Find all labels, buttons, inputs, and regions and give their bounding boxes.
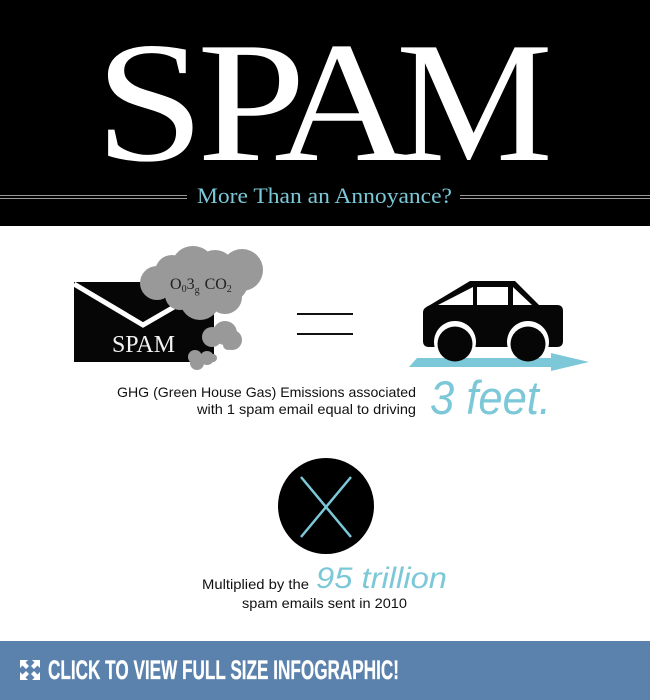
title: S (95, 8, 205, 198)
cloud label: 3 (187, 276, 195, 293)
subtitle: More Than an Annoyance? (197, 183, 452, 208)
icon: small cloud (188, 350, 217, 370)
cloud label: CO (205, 276, 227, 293)
title: A (274, 8, 412, 198)
text: multiplied by: Multiplied by the (202, 576, 309, 592)
icon: large cloud (140, 246, 263, 320)
cloud label: 2 (227, 284, 232, 295)
cloud label: g (195, 285, 200, 296)
title: P (197, 7, 306, 197)
panel: header (0, 0, 650, 226)
title: M (396, 7, 553, 198)
icon: multiply circle (278, 458, 374, 554)
icon: medium cloud (202, 321, 242, 350)
text: GHG emissions (117, 384, 416, 417)
icon: equals sign (297, 313, 353, 335)
panel: footer banner (0, 641, 650, 700)
text: multiplied by (202, 562, 447, 611)
text: GHG emissions: GHG (Green House Gas) Emissions associated (117, 384, 416, 400)
icon: expand arrows (20, 660, 40, 680)
footer text: CLICK TO VIEW FULL SIZE INFOGRAPHIC! (48, 655, 399, 685)
icon: spam envelope with emission clouds: SPAM (112, 332, 175, 358)
text: spam emails sent: spam emails sent in 2010 (242, 595, 407, 611)
cloud label: 0 (182, 284, 187, 295)
text: GHG emissions: with 1 spam email equal to driving (196, 401, 416, 417)
icon: spam envelope with emission clouds (74, 246, 263, 370)
text: 95 trillion: 95 trillion (316, 562, 447, 595)
icon: car (423, 281, 563, 362)
text: 3 feet: 3 feet. (430, 371, 551, 424)
cloud label: O (170, 276, 182, 293)
title (95, 7, 553, 198)
icon: blue road arrow (409, 353, 589, 371)
